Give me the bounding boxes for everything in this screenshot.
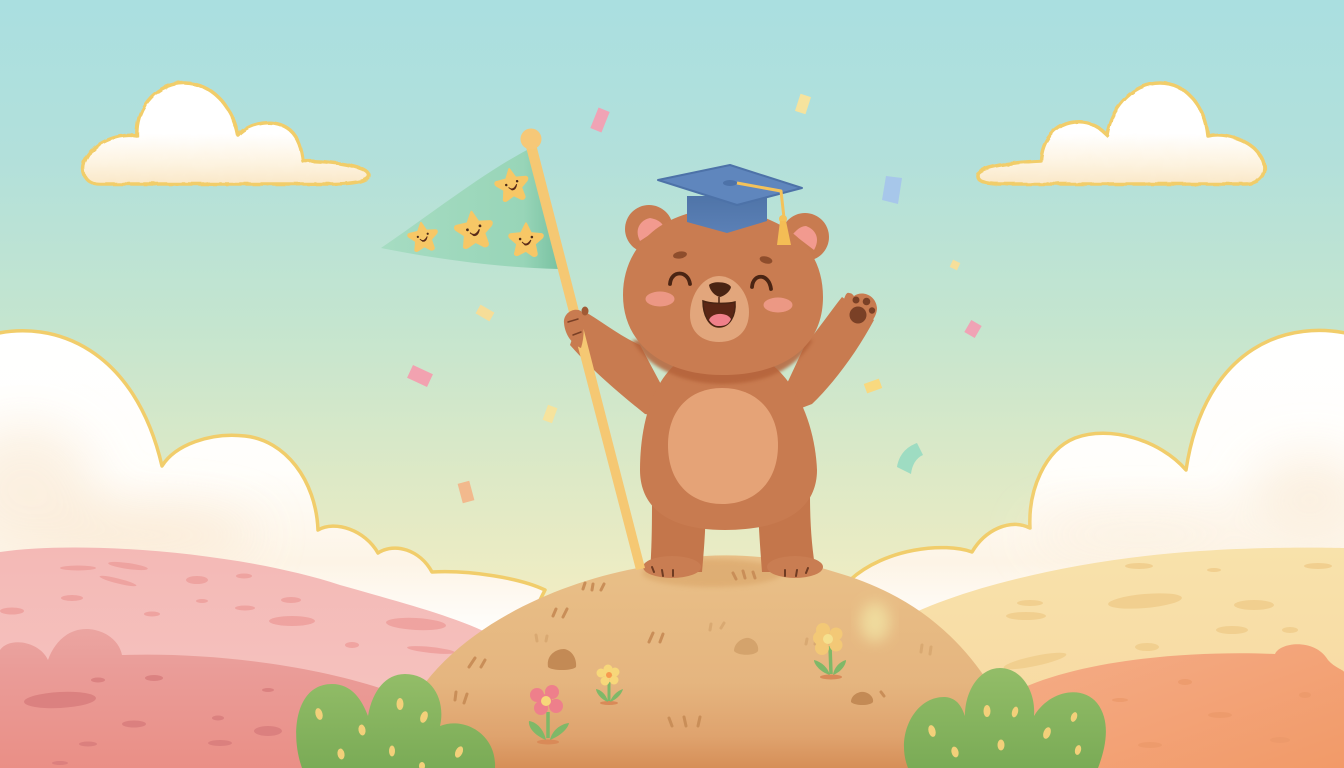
bear: legs xyxy=(650,495,816,572)
bear: brows xyxy=(672,250,773,265)
hill: back right yellow xyxy=(890,548,1344,768)
flag pole xyxy=(520,128,645,570)
bear: mouth xyxy=(703,297,735,327)
hill: central sand mound xyxy=(395,555,1020,768)
bear: right paw xyxy=(842,293,877,332)
bear: eyes xyxy=(670,274,771,289)
flower: yellow xyxy=(596,664,623,705)
bush: right xyxy=(904,668,1106,768)
hill: front right peach xyxy=(1000,644,1344,768)
cloud: top right xyxy=(977,83,1264,184)
confetti xyxy=(407,94,982,503)
cloud bank: right xyxy=(850,330,1344,640)
hill: front left coral xyxy=(0,629,400,768)
bear: right arm xyxy=(770,297,874,420)
bear: neck shadow xyxy=(632,340,813,384)
bear: belly xyxy=(668,388,778,504)
cloud: top left xyxy=(83,83,369,184)
cloud shading: warm haze xyxy=(0,425,1344,560)
bear: graduation cap xyxy=(658,165,802,245)
bear xyxy=(570,165,877,578)
bear: fingers over pole xyxy=(564,306,588,348)
flag: pennant with stars xyxy=(381,150,559,269)
bear: nose xyxy=(709,282,731,297)
bear: head xyxy=(623,210,823,375)
grass tufts xyxy=(455,571,884,726)
bush: left xyxy=(296,674,495,768)
bear: cheeks xyxy=(646,292,792,312)
bear: feet xyxy=(643,556,823,578)
bear: left arm xyxy=(570,310,680,420)
bear: ears xyxy=(625,205,829,261)
bear: body xyxy=(640,345,817,530)
bear: muzzle xyxy=(690,276,749,342)
flower: pink xyxy=(529,685,569,744)
flower: faded yellow with sun glare xyxy=(813,602,890,680)
hill: back left pink xyxy=(0,547,510,768)
cloud bank: left xyxy=(0,331,545,640)
pebbles xyxy=(548,649,576,670)
